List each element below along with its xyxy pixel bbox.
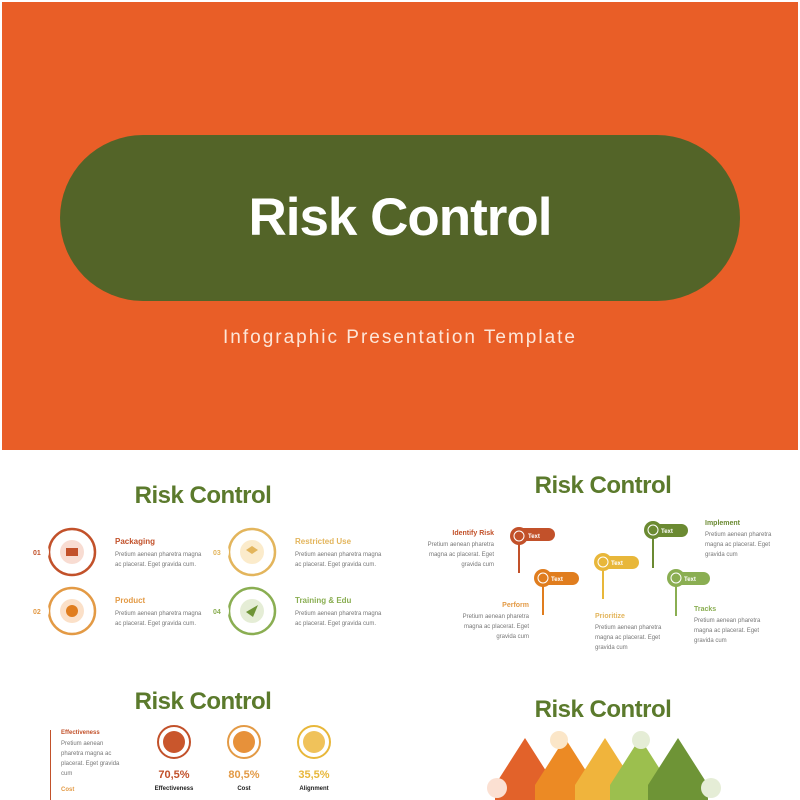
items graphic: 01 [33,550,41,557]
text: Product: ac placerat. Eget gravida cum. [115,621,196,627]
text: Restricted Use: Restricted Use [295,537,351,546]
text: Training: ac placerat. Eget gravida cum. [295,621,376,627]
text: Packaging: Pretium aenean pharetra magna [115,552,201,558]
text: Prioritize: Prioritize [595,613,625,620]
text: Product: Pretium aenean pharetra magna [115,611,201,617]
stat cards: Cost [237,786,251,792]
text: Prioritize: Pretium aenean pharetra magna ac placerat. Eget gravida cum [595,625,661,651]
hero banner [2,2,798,450]
text: Packaging: Packaging [115,537,155,546]
text: Restricted Use [295,537,382,568]
text: Packaging: ac placerat. Eget gravida cum. [115,562,196,568]
stat cards: Alignment [299,786,329,792]
pins graphic: Text [611,561,623,567]
side text: Pretium aenean pharetra magna ac placerat. Eget gravida cum [61,741,119,777]
text: Restricted Use: ac placerat. Eget gravida cum. [295,562,376,568]
text: Training: Training & Edu [295,596,351,605]
panel: four items [33,482,382,636]
text: Training [295,596,382,627]
pins graphic: Text [684,577,696,583]
text: Product: Product [115,596,145,605]
items graphic: 04 [213,609,221,616]
heading: Risk Control [135,688,271,715]
pins graphic: Text [661,529,673,535]
heading: Risk Control [135,482,271,509]
panel: diamonds [487,696,721,800]
text: Tracks: Pretium aenean pharetra magna ac placerat. Eget gravida cum [694,618,760,644]
text: Packaging [115,537,202,568]
stat cards: Effectiveness [155,786,194,792]
text: Perform: Perform [502,602,529,609]
stat cards: 80,5% [228,769,260,781]
title pill [60,135,740,301]
items graphic: 02 [33,609,41,616]
title pill: Risk Control [248,188,552,247]
side text [50,730,125,800]
subtitle: Infographic Presentation Template [223,327,577,348]
text: Restricted Use: Pretium aenean pharetra magna [295,552,381,558]
stat cards [155,725,331,792]
text: Implement [705,520,772,558]
stat cards: 70,5% [158,769,190,781]
heading: Risk Control [535,696,671,723]
text: Product [115,596,202,627]
pins graphic [510,521,710,616]
stat cards: 35,5% [298,769,330,781]
diamonds chart [487,731,721,800]
text: Tracks [694,606,760,644]
text: Identify Risk [428,530,494,568]
text: Perform: Pretium aenean pharetra magna ac placerat. Eget gravida cum [463,614,529,640]
text: Training: Pretium aenean pharetra magna [295,611,381,617]
items graphic [33,528,276,636]
text: Perform [463,602,529,640]
side text: Cost [61,787,74,793]
text: Implement: Implement [705,520,740,527]
text: Implement: Pretium aenean pharetra magna ac placerat. Eget gravida cum [705,532,771,558]
pins graphic: Text [528,534,540,540]
pins graphic: Text [551,577,563,583]
panel: percentages [50,688,331,800]
panel: pins [428,472,772,651]
text: Identify Risk: Pretium aenean pharetra magna ac placerat. Eget gravida cum [428,542,494,568]
text: Prioritize [595,612,662,651]
heading: Risk Control [535,472,671,499]
text: Identify Risk: Identify Risk [452,530,494,537]
items graphic: 03 [213,550,221,557]
side text: Effectiveness [61,730,100,736]
text: Tracks: Tracks [694,606,716,613]
